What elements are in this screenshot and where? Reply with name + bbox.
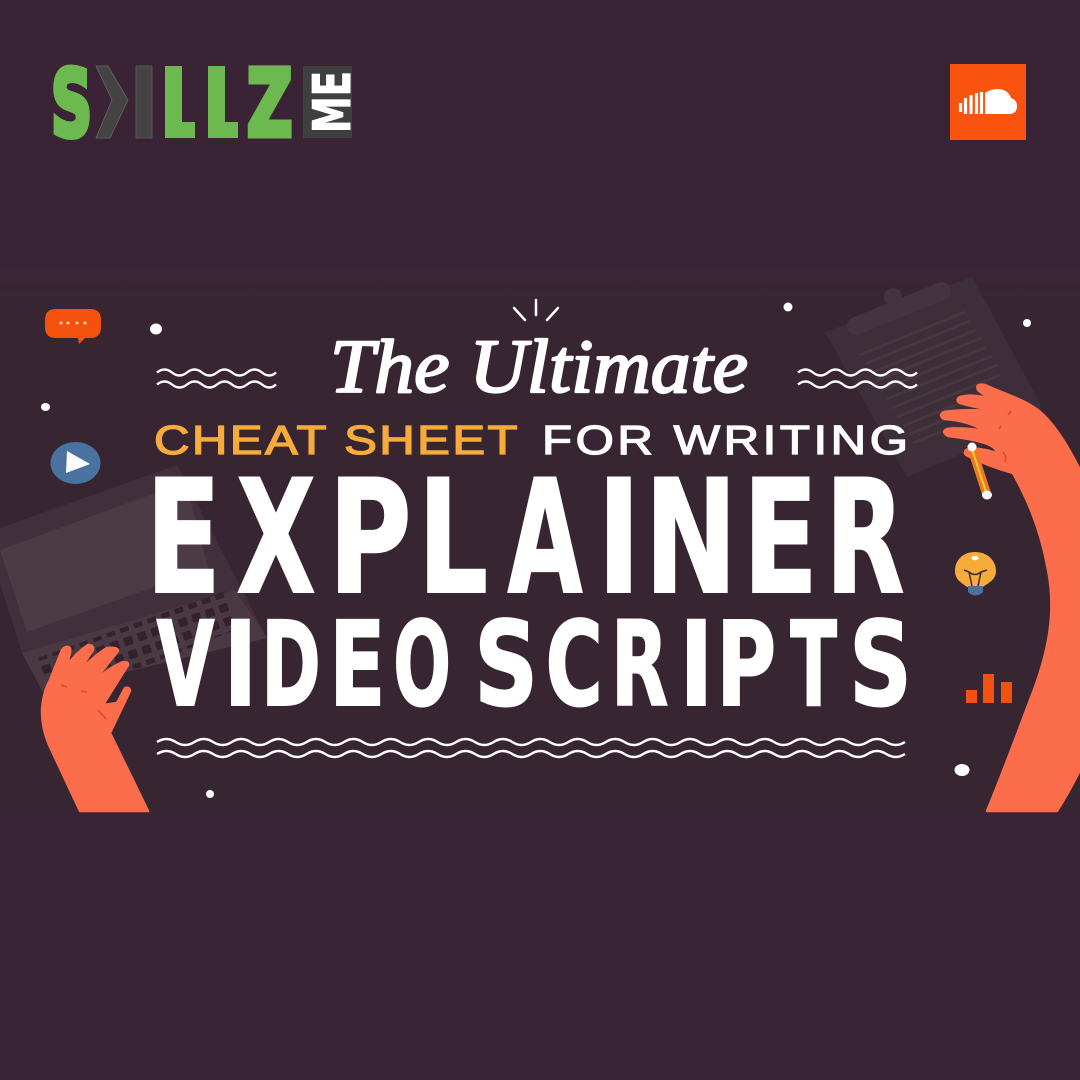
icon: pencil	[968, 442, 992, 500]
left hand and arm	[42, 645, 148, 811]
heading: Explainer: E	[743, 446, 818, 629]
heading: Explainer: P	[328, 448, 412, 630]
heading: Explainer	[146, 446, 904, 630]
icon: soundcloud	[950, 64, 1026, 140]
heading: Video Scripts: O	[393, 596, 451, 733]
subheading part: For Writing: FOR WRITING	[542, 417, 908, 463]
logo: Skillz Me	[51, 50, 363, 160]
icon: play button	[50, 442, 100, 484]
heading: Video Scripts: I	[224, 597, 257, 733]
heading: Video Scripts: S	[474, 598, 538, 733]
background banner	[0, 268, 1080, 812]
logo letter Z: Z	[247, 50, 292, 158]
heading: Video Scripts: P	[716, 596, 776, 733]
subheading part: Cheat Sheet: CHEAT SHEET	[154, 417, 518, 463]
heading: Video Scripts: T	[790, 596, 837, 733]
icon: bar chart	[966, 674, 1012, 703]
wave right	[798, 370, 917, 388]
heading: Explainer: I	[597, 446, 641, 629]
heading: Video Scripts: S	[849, 597, 912, 733]
spark marks	[514, 300, 558, 320]
logo letter S: S	[51, 51, 92, 158]
heading: Explainer: L	[418, 446, 488, 629]
decorative dots	[41, 302, 1031, 798]
heading: Video Scripts: I	[680, 597, 713, 733]
logo ME box: ME	[302, 71, 363, 133]
wave left	[157, 370, 276, 388]
logo letter L second: L	[204, 50, 238, 160]
heading: Explainer: R	[826, 448, 904, 630]
logo bar I	[136, 66, 152, 138]
heading: Explainer: X	[236, 448, 316, 630]
icon: speech bubble	[45, 309, 101, 344]
subheading: Cheat Sheet for Writing	[154, 417, 908, 463]
heading: Explainer: A	[508, 446, 583, 629]
heading: Video Scripts: R	[611, 598, 668, 734]
wave bottom	[157, 739, 905, 757]
heading: Explainer: N	[645, 447, 737, 630]
heading: The Ultimate: The Ultimate	[330, 325, 748, 409]
laptop illustration	[0, 465, 267, 692]
clipboard illustration	[825, 277, 1042, 477]
heading: Video Scripts	[157, 596, 912, 734]
icon: light bulb	[955, 552, 996, 596]
heading: Video Scripts: V	[157, 598, 214, 734]
heading: Explainer: E	[146, 446, 221, 629]
heading: Video Scripts: C	[546, 598, 603, 733]
logo chevron K	[96, 66, 128, 138]
right hand and arm	[941, 385, 1080, 811]
heading: Video Scripts: E	[329, 596, 385, 733]
logo letter L: L	[161, 50, 195, 160]
heading: Video Scripts: D	[261, 596, 321, 733]
